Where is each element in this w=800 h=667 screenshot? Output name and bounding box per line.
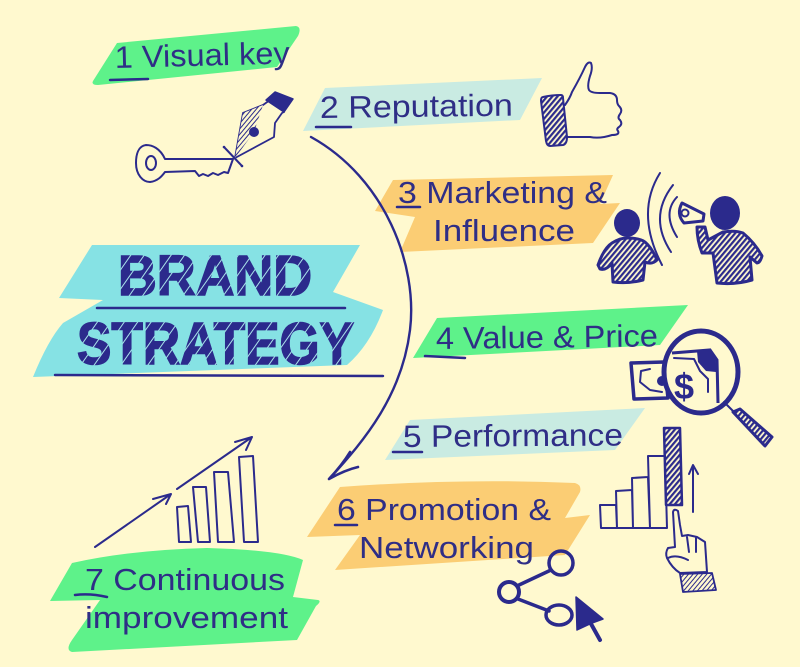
arrows: [95, 437, 252, 547]
key: [136, 145, 233, 182]
icon: magnifier over money: [631, 331, 772, 446]
banner: [413, 305, 688, 358]
label: 5 Performance: [403, 417, 623, 454]
icon: key and pen nib: [136, 92, 293, 182]
banner: [303, 78, 542, 131]
handle: [724, 402, 735, 413]
megaphone: [679, 203, 704, 223]
title: brand strategy: [33, 244, 383, 377]
label line 1: 6 Promotion &: [337, 492, 551, 527]
label line 2: improvement: [85, 600, 288, 635]
speaker: [710, 196, 740, 230]
icon: share network: [499, 551, 573, 625]
banknote: [631, 362, 668, 399]
underline: [316, 126, 351, 128]
title word: brand: BRAND: [118, 244, 312, 308]
item 3: marketing and influence: [375, 175, 620, 252]
banner: [385, 408, 645, 460]
icon: growth chart with arrows: [95, 437, 258, 547]
item 1: visual key: [93, 26, 300, 85]
pen nib: [235, 100, 284, 158]
label line 1: 3 Marketing &: [398, 175, 607, 210]
underline: [110, 79, 148, 80]
title banner: [33, 245, 383, 377]
curved arrow: [311, 137, 411, 479]
bars: [177, 456, 258, 542]
underline: [393, 451, 422, 453]
icon: performance bars with hand: [600, 428, 716, 592]
label line 1: 7 Continuous: [85, 562, 285, 597]
label: 2 Reputation: [320, 88, 513, 125]
icon: thumbs up: [541, 62, 621, 146]
icon: cursor: [576, 597, 603, 640]
dollar sign: $: [674, 366, 694, 407]
cuff: [680, 573, 716, 592]
item 2: reputation: [303, 78, 542, 131]
icon: people with megaphone: [598, 173, 762, 284]
item 6: promotion and networking: [307, 481, 590, 570]
underline: [397, 206, 420, 208]
listener: [614, 209, 640, 237]
hand: [666, 510, 707, 573]
banner: [50, 548, 320, 652]
lens: [664, 331, 738, 413]
label: 4 Value & Price: [436, 318, 658, 356]
highlighted bar: [664, 428, 682, 505]
label: 1 Visual key: [114, 35, 291, 75]
label line 2: Networking: [359, 530, 534, 565]
document: [672, 350, 718, 403]
bars: [600, 456, 667, 528]
item 4: value and price: [413, 305, 688, 358]
underline: [75, 594, 107, 597]
title underlines: [55, 308, 383, 376]
item 5: performance: [385, 408, 645, 460]
banner: [93, 26, 300, 85]
banner: [307, 481, 590, 570]
item 7: continuous improvement: [50, 548, 320, 652]
title word: strategy: STRATEGY: [77, 311, 354, 377]
underline: [425, 356, 465, 358]
underline: [335, 524, 357, 526]
up arrow: [689, 465, 698, 512]
label line 2: Influence: [433, 213, 575, 248]
banner: [375, 175, 620, 252]
sound waves: [648, 173, 677, 265]
